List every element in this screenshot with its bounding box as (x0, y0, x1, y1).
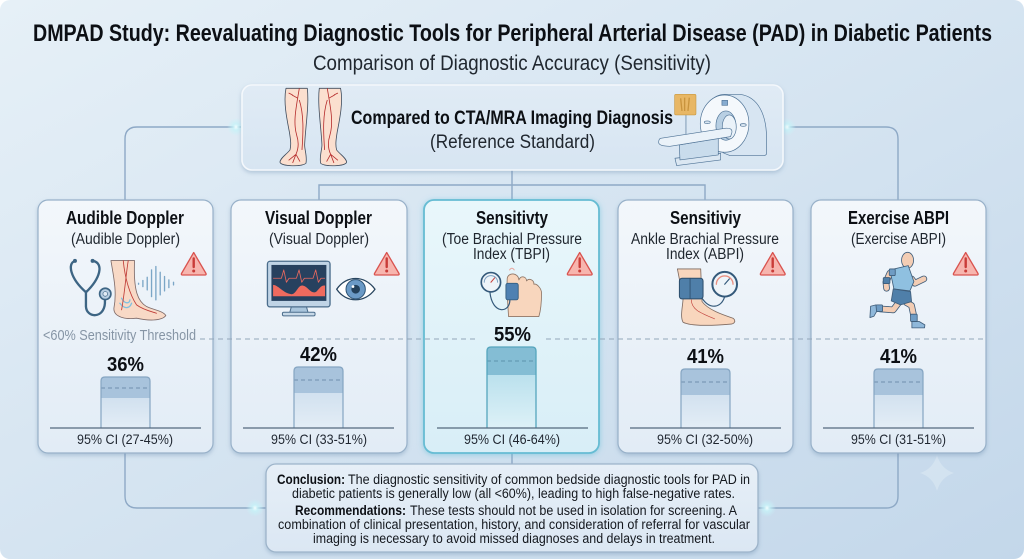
confidence interval: 95% CI (32-50%) (657, 431, 753, 447)
panel: Ankle Brachial Pressure Index (618, 200, 793, 453)
sparkle decoration (920, 455, 954, 491)
value: 42% (300, 344, 337, 366)
panel: Exercise ABPI (811, 200, 986, 453)
value: 36% (107, 354, 144, 376)
bar: 36% (101, 377, 150, 428)
heading: Sensitivty (476, 208, 548, 228)
heading: Visual Doppler (265, 208, 372, 228)
conclusion text (277, 472, 750, 501)
icon: legs with arteries (280, 88, 347, 166)
conclusion text: Conclusion: (277, 472, 345, 487)
subtitle: Index (ABPI) (666, 246, 744, 263)
baseline (437, 427, 588, 429)
confidence interval: 95% CI (33-51%) (271, 431, 367, 447)
icon: toe cuff and gauge (481, 268, 542, 317)
panel: conclusion and recommendations (266, 464, 758, 552)
conclusion text: The diagnostic sensitivity of common bedside diagnostic tools for PAD in (348, 472, 750, 487)
recommendations text: Recommendations: (295, 503, 406, 518)
value: 41% (880, 346, 917, 368)
confidence interval: 95% CI (27-45%) (77, 431, 173, 447)
icon: warning (567, 252, 592, 275)
recommendations text: These tests should not be used in isolation for screening. A (410, 503, 737, 518)
baseline (243, 427, 394, 429)
baseline (50, 427, 201, 429)
confidence interval: 95% CI (46-64%) (464, 431, 560, 447)
panel: Audible Doppler (38, 200, 213, 453)
baseline (823, 427, 974, 429)
subtitle: (Exercise ABPI) (851, 231, 946, 248)
icon: runner (870, 252, 925, 328)
subtitle: (Toe Brachial Pressure (442, 231, 582, 248)
heading: Exercise ABPI (848, 208, 949, 228)
icon: ankle cuff and gauge (677, 269, 737, 325)
subtitle: Comparison of Diagnostic Accuracy (Sensitivity) (313, 52, 711, 75)
icon: warning (181, 252, 206, 275)
subtitle: (Audible Doppler) (71, 231, 180, 248)
value: 55% (494, 324, 531, 346)
panel: Visual Doppler (231, 200, 407, 453)
value: 41% (687, 346, 724, 368)
subtitle (442, 231, 582, 263)
bar: 41% (874, 369, 923, 428)
heading: Audible Doppler (66, 208, 184, 228)
icon: warning (374, 252, 399, 275)
threshold label: <60% Sensitivity Threshold (43, 327, 196, 344)
recommendations text: imaging is necessary to avoid missed diagnoses and delays in treatment. (313, 531, 715, 546)
panel: Toe Brachial Pressure Index (424, 200, 599, 453)
connectors (125, 127, 898, 508)
sub-heading: (Reference Standard) (430, 132, 595, 153)
conclusion text: diabetic patients is generally low (all <60%), leading to high false-negative rates. (292, 486, 735, 501)
subtitle: (Visual Doppler) (269, 231, 369, 248)
panel: reference standard (242, 85, 783, 170)
bar: 42% (294, 367, 343, 428)
heading: Compared to CTA/MRA Imaging Diagnosis (351, 108, 673, 129)
connector glows (227, 118, 796, 517)
icon: MRI scanner (659, 94, 767, 166)
subtitle: Index (TBPI) (473, 246, 550, 263)
recommendations text: combination of clinical presentation, history, and consideration of referral for vascular (278, 517, 750, 532)
icon: warning (953, 252, 978, 275)
icon: stethoscope, foot and sound wave (71, 259, 174, 320)
recommendations text (278, 503, 750, 546)
bar: 55% (487, 347, 536, 428)
threshold line (200, 338, 984, 340)
confidence interval: 95% CI (31-51%) (851, 431, 946, 447)
icon: warning (760, 252, 785, 275)
bar: 41% (681, 369, 730, 428)
subtitle: Ankle Brachial Pressure (631, 231, 779, 248)
heading: Sensitiviy (670, 208, 741, 228)
baseline (630, 427, 781, 429)
icon: monitor and eye (267, 261, 375, 316)
subtitle (631, 231, 779, 263)
